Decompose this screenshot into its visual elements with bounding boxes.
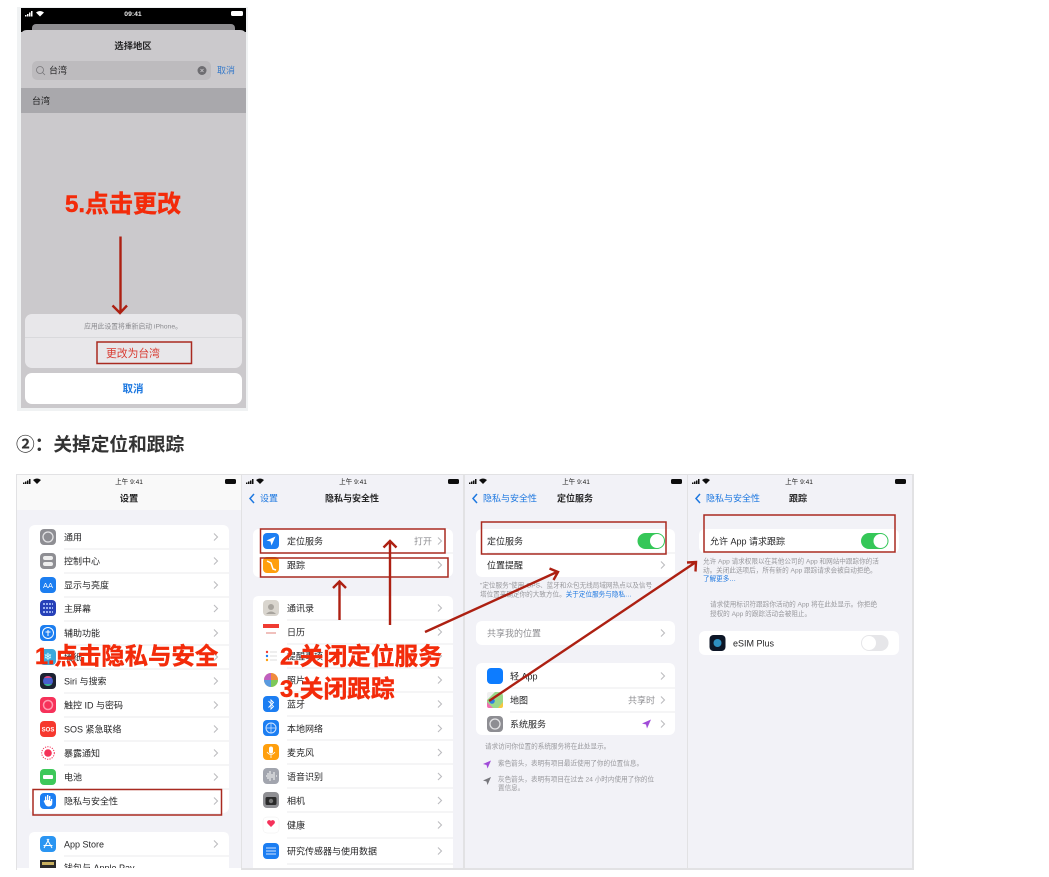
row: reminders: 提醒事项 (287, 650, 323, 662)
row: tracking: 跟踪 (287, 560, 305, 570)
share my location card (476, 621, 675, 645)
highlight box: tracking toggle (704, 515, 895, 552)
esim plus row (699, 631, 899, 655)
status bar (692, 477, 906, 486)
search result row: 台湾 (32, 95, 50, 106)
toggle on (638, 533, 665, 549)
arrow: to tracking row (333, 582, 346, 620)
status bar: 09:41 (124, 11, 142, 18)
row: display (40, 577, 218, 593)
app store card (29, 832, 229, 873)
row: sos (40, 721, 218, 737)
row: exposure (40, 745, 218, 761)
allow tracking card (699, 529, 899, 553)
nav title: 跟踪 (789, 492, 807, 504)
row: sos: SOS 紧急联络 (64, 724, 122, 734)
row: accessibility (40, 625, 218, 641)
panel: four settings screenshots (16, 474, 914, 877)
toggle off (861, 635, 888, 651)
heading: ②：关掉定位和跟踪 (16, 434, 184, 455)
tracking note (710, 600, 877, 618)
nav back: 隐私与安全性 (706, 492, 760, 504)
nav title: 隐私与安全性 (325, 492, 379, 504)
row: home screen: 主屏幕 (64, 603, 91, 614)
cancel link: 取消 (217, 64, 235, 76)
status bar: 上午 9:41 (562, 477, 590, 486)
row: speech recognition (263, 768, 442, 784)
row: maps (487, 692, 664, 708)
row: camera (263, 792, 442, 808)
location legend notes: 请求访问你位置的系统服务将在此处显示。 (485, 742, 610, 750)
confirm dialog: 应用此设置将重新启动 iPhone。 (84, 322, 182, 330)
highlight box: location row (260, 529, 445, 553)
row: calendar (263, 624, 442, 640)
row: maps: 地图 (510, 694, 528, 706)
row: microphone (263, 744, 442, 760)
row: privacy: 隐私与安全性 (64, 796, 118, 806)
row: touch id: 触控 ID 与密码 (64, 700, 123, 710)
row: app clips (487, 668, 664, 684)
annotation: step 5: 5.点击更改 (65, 191, 181, 218)
row: battery (40, 769, 218, 785)
cancel button: 取消 (122, 382, 144, 395)
row: tracking (263, 557, 442, 573)
confirm dialog (25, 314, 242, 368)
location footnote: "定位服务"使用 GPS、蓝牙和众包无线局域网热点以及信号 (480, 580, 652, 590)
row: siri: Siri 与搜索 (64, 676, 106, 686)
nav back: 设置 (260, 494, 278, 504)
row: wallpaper (40, 649, 218, 665)
search result row (21, 88, 246, 113)
location legend notes: 紫色箭头，表明有项目最近使用了你的位置信息。 (498, 758, 643, 768)
location legend notes: 置信息。 (498, 783, 524, 792)
tracking explanation: 允许 App 请求权限以在其他公司的 App 和网站中跟踪你的活 (703, 556, 879, 566)
status bar (469, 477, 682, 486)
row: general (40, 529, 218, 545)
nav back (250, 494, 278, 504)
status bar (246, 477, 459, 486)
row: research sensors (263, 843, 442, 859)
toggle on (861, 533, 888, 549)
row: control centre (40, 553, 218, 569)
row: sos: SOS (42, 728, 54, 734)
status bar: 上午 9:41 (785, 477, 813, 486)
arrow: to location toggle (425, 568, 558, 632)
arrow: to tracking toggle (489, 562, 696, 701)
row: system services: 系统服务 (510, 718, 546, 730)
row: research sensors: 研究传感器与使用数据 (287, 846, 377, 856)
search field: 台湾 (49, 64, 67, 76)
status bar: 上午 9:41 (115, 477, 143, 486)
row: home screen (40, 600, 218, 616)
location toggle card: 位置提醒 (487, 560, 523, 570)
row: health (263, 817, 442, 833)
row: contacts: 通讯录 (287, 604, 314, 614)
location footnote (480, 580, 652, 598)
highlight box: privacy row (33, 790, 222, 815)
row: speech recognition: 语音识别 (287, 771, 323, 782)
row: siri (40, 673, 218, 689)
row: local network (263, 720, 442, 736)
arrow: to location row (384, 541, 396, 625)
sheet title: 选择地区 (114, 40, 152, 51)
row: local network: 本地网络 (287, 723, 323, 734)
row: wallpaper: ❄ (44, 652, 52, 663)
tracking note: 请求使用标识符跟踪你活动的 App 将在此处显示。你拒绝 (710, 600, 877, 608)
row: touch id (40, 697, 218, 713)
row: photos: 照片 (287, 674, 305, 686)
row: microphone: 麦克风 (287, 747, 314, 758)
location footnote: 塔位置来确定你的大致方位。关于定位服务与隐私… (480, 590, 632, 598)
row: camera: 相机 (287, 795, 305, 806)
cancel button (25, 373, 242, 404)
row: exposure: 暴露通知 (64, 748, 100, 758)
share my location card: 共享我的位置 (487, 628, 541, 638)
row: contacts (263, 600, 442, 616)
status bar (23, 477, 236, 486)
screen: settings (17, 475, 241, 877)
row: health: 健康 (287, 820, 305, 830)
location legend notes (483, 742, 654, 792)
app store card: App Store (64, 840, 104, 850)
screen: location services (465, 475, 687, 868)
tracking explanation: 了解更多… (703, 574, 736, 583)
row: control centre: 控制中心 (64, 556, 100, 566)
highlight box: location toggle (482, 522, 666, 554)
location and tracking card (253, 529, 453, 577)
location toggle card (476, 529, 675, 577)
location legend notes: 灰色箭头，表明有项目在过去 24 小时内使用了你的位 (498, 774, 654, 784)
status bar (25, 11, 243, 18)
annotation: step 1: 1.点击隐私与安全 (35, 643, 219, 669)
highlight box: change button (97, 342, 192, 364)
nav title: 定位服务 (557, 492, 593, 504)
search field (32, 61, 211, 80)
row: display: 显示与亮度 (64, 580, 109, 590)
row: app clips: 轻 App (510, 670, 538, 682)
tracking explanation: 动。关闭此选项后，所有新的 App 跟踪请求会被自动拒绝。 (703, 566, 877, 574)
annotation: step 3: 3.关闭跟踪 (280, 676, 395, 703)
nav back: 隐私与安全性 (483, 492, 537, 504)
tracking note: 授权的 App 的跟踪活动会被阻止。 (710, 609, 811, 618)
row: bluetooth: 蓝牙 (287, 698, 305, 710)
row: system services (487, 716, 664, 732)
settings list card (29, 525, 229, 813)
esim plus row: eSIM Plus (733, 638, 775, 648)
row: accessibility: 辅助功能 (64, 628, 100, 638)
row: battery: 电池 (64, 772, 82, 782)
arrow: to change button (112, 236, 127, 313)
apps card (476, 663, 675, 735)
icon: esim plus (710, 635, 726, 651)
annotation: step 2: 2.关闭定位服务 (280, 642, 442, 670)
row: calendar: 日历 (287, 628, 305, 638)
confirm dialog: 更改为台湾 (106, 346, 160, 360)
screen: tracking (688, 475, 912, 868)
row: location: 打开 (414, 536, 432, 546)
screen: privacy and security (242, 475, 463, 868)
row: photos (264, 673, 442, 687)
highlight box: tracking row (260, 558, 448, 577)
row: general: 通用 (64, 532, 82, 542)
row: location: 定位服务 (287, 536, 323, 546)
row: display: AA (43, 581, 53, 590)
tracking explanation (703, 556, 879, 583)
nav title: 设置 (120, 492, 138, 504)
row: privacy (40, 793, 218, 809)
row: reminders (263, 648, 442, 664)
row: bluetooth (263, 696, 442, 712)
permissions list card (253, 596, 453, 868)
row: wallpaper: 墙纸 (64, 652, 82, 662)
status bar: 上午 9:41 (339, 477, 367, 486)
panel: region picker phone screenshot (17, 7, 248, 411)
row: maps: 共享时 (628, 694, 655, 706)
app store card: 钱包与 Apple Pay (64, 862, 135, 873)
allow tracking card: 允许 App 请求跟踪 (710, 536, 785, 546)
row: location (263, 533, 442, 549)
location toggle card: 定位服务 (487, 536, 523, 546)
